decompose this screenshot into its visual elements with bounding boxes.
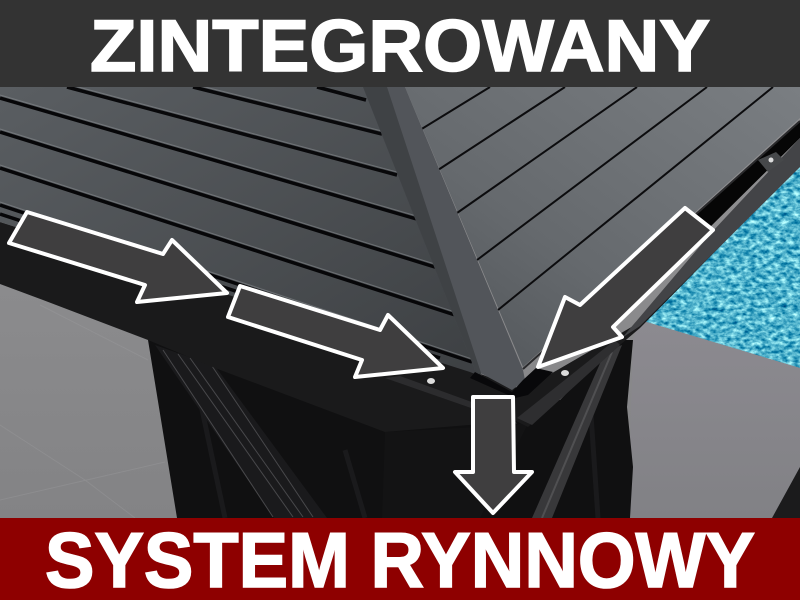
photo: right diagonal strut <box>532 345 622 518</box>
arrow: first arrow pointing right along left gutter <box>9 212 227 302</box>
photo: corner fascia <box>385 340 620 425</box>
arrow: second arrow pointing right toward corner <box>228 286 443 377</box>
photo: gutter opening <box>696 122 800 232</box>
heading: top title: ZINTEGROWANY <box>90 6 710 87</box>
arrow: third arrow pointing down-left toward corner <box>538 208 713 367</box>
photo: left diagonal strut <box>155 345 327 518</box>
photo: swimming pool water <box>646 167 800 368</box>
photo: black curtains <box>148 340 633 518</box>
photo: left roof panels <box>0 84 480 376</box>
icon: left rivet <box>427 378 435 384</box>
photo: roof ridge beam <box>363 87 525 390</box>
photo: ground floor <box>0 87 800 518</box>
icon: right rivet <box>561 370 569 376</box>
arrow: fourth arrow pointing down <box>455 397 532 513</box>
photo: corner post <box>382 420 530 518</box>
bottom banner <box>0 516 800 600</box>
photo: right roof panels <box>405 87 800 369</box>
photo: gutter shadow at corner <box>470 368 553 398</box>
photo: concrete pool edge <box>628 320 800 518</box>
photo: gutter clip <box>758 152 784 172</box>
top banner <box>0 0 800 87</box>
photo: dark object bottom right <box>772 467 800 518</box>
photo: frame beam <box>0 118 800 432</box>
photo: gutter outer lip <box>622 138 800 338</box>
